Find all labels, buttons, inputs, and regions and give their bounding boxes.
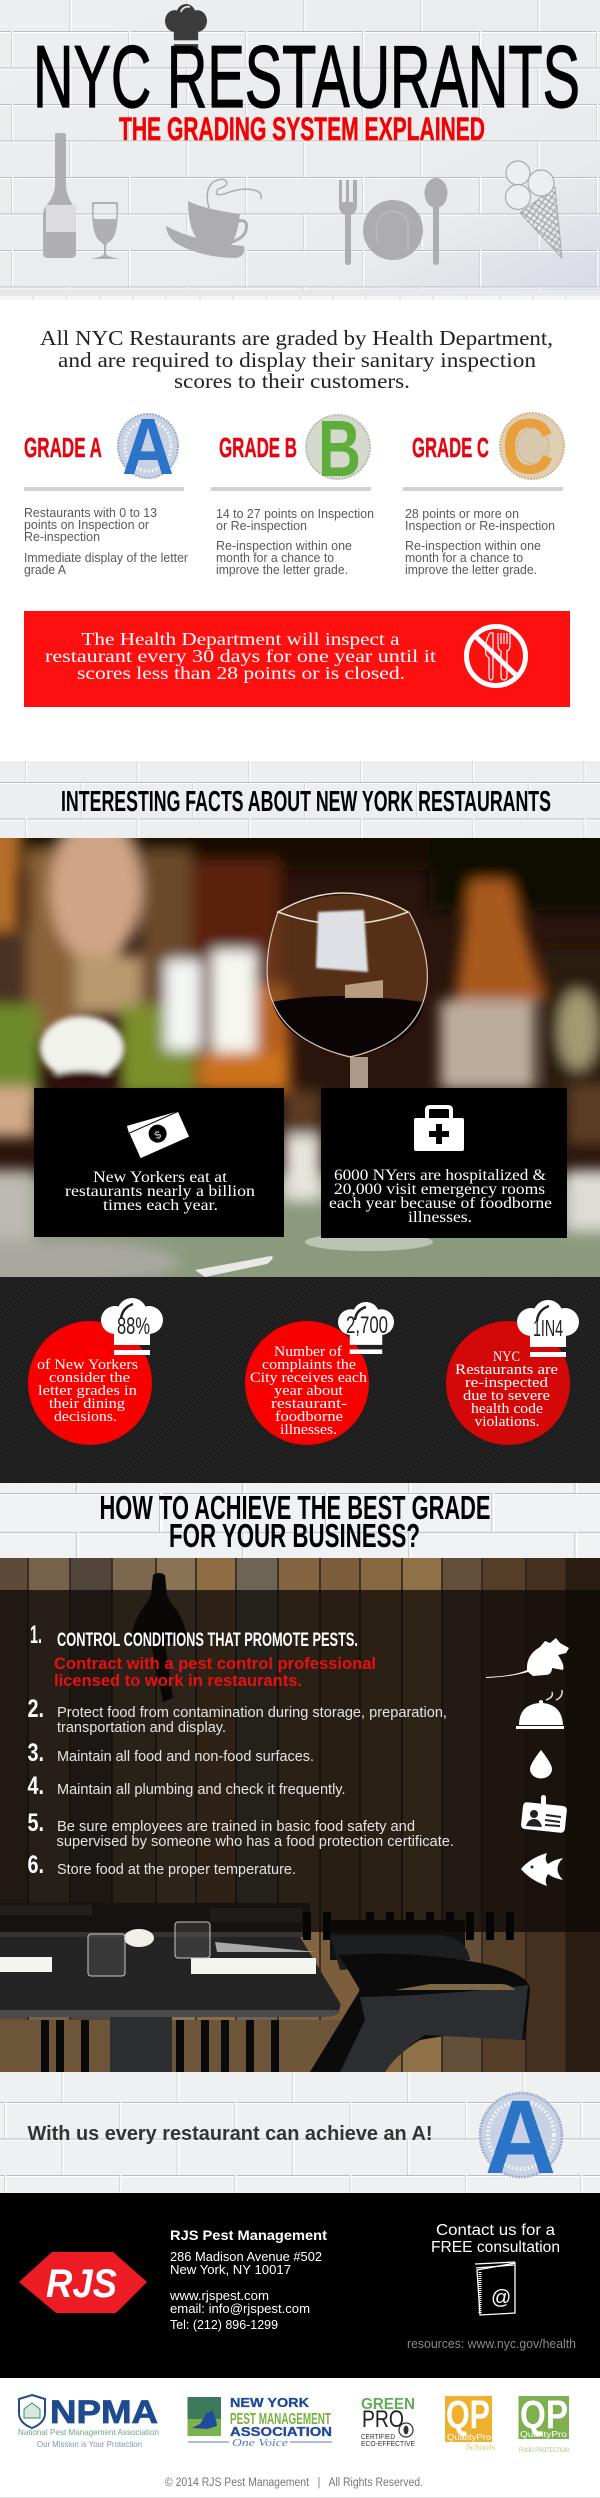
left wine glass <box>40 1016 124 1089</box>
statistic: 2,700: foodborne <box>275 1409 343 1425</box>
step 2: Protect food from contamination during storage, preparation, <box>57 1705 447 1721</box>
panel: grade C <box>403 402 564 577</box>
icon: banknotes <box>125 1104 190 1159</box>
logo: QualityPro Schools: Schools <box>466 2442 496 2452</box>
step 1: Contract with a pest control professional <box>54 1655 376 1673</box>
text: grade C description: month for a chance to <box>405 551 523 565</box>
logo: GreenPro <box>361 2396 415 2448</box>
logo: GreenPro: PRO <box>362 2406 404 2433</box>
logo: New York Pest Management Association: ASSOCIATION <box>230 2425 332 2439</box>
logo: NPMA: National Pest Management Association <box>18 2427 159 2437</box>
step 4: Maintain all plumbing and check it frequently. <box>57 1782 346 1798</box>
heading: how to achieve <box>100 1489 490 1554</box>
fact text: 20,000 visit emergency rooms <box>334 1181 545 1198</box>
icon: grade C seal: C <box>502 402 554 490</box>
company address: New York, NY 10017 <box>170 2262 291 2277</box>
statistic: 88%: 88% <box>117 1313 150 1340</box>
icon: grade A seal: A <box>122 402 174 491</box>
step 1: 1. <box>30 1621 42 1649</box>
text: grade C description: Inspection or Re-inspection <box>405 519 555 533</box>
foreground table <box>0 1922 340 2072</box>
step 1: CONTROL CONDITIONS THAT PROMOTE PESTS. <box>57 1630 358 1651</box>
step 6 <box>28 1851 296 1879</box>
statistic: 1 in 4: due to severe <box>463 1388 550 1404</box>
heading: grade A: GRADE A <box>24 432 102 463</box>
step 5 <box>28 1809 454 1850</box>
text: grade C description: improve the letter grade. <box>405 563 537 577</box>
logo: QualityPro Schools: QP <box>446 2393 490 2437</box>
company address: RJS Pest Management <box>170 2227 327 2243</box>
panel: wood wall and table photo <box>0 1558 600 2072</box>
contact call to action <box>431 2222 560 2256</box>
logo: RJS: RJS <box>46 2262 117 2306</box>
callout text: scores less than 28 points or is closed. <box>77 663 405 683</box>
text: grade B description: or Re-inspection <box>216 519 307 533</box>
panel: interesting facts heading band <box>0 761 600 838</box>
step 2: 2. <box>28 1695 44 1723</box>
company address: 286 Madison Avenue #502 <box>170 2249 322 2264</box>
icon: chef hat above title <box>165 4 207 48</box>
statistic: 1 in 4: Restaurants are <box>455 1362 558 1378</box>
text: grade B description: month for a chance to <box>216 551 334 565</box>
logo: GreenPro: GREEN <box>361 2396 415 2413</box>
step 3 <box>28 1739 314 1767</box>
text: grade B description: Re-inspection within one <box>216 539 352 553</box>
icon: rat <box>486 1638 569 1678</box>
lamp <box>130 1573 188 1643</box>
callout: health department inspection <box>24 611 570 707</box>
step 2 <box>28 1695 447 1736</box>
text: grade A description: points on Inspection or <box>24 518 149 532</box>
company address: Tel: (212) 896-1299 <box>170 2317 278 2332</box>
logo: GreenPro: ECO-EFFECTIVE <box>361 2439 415 2448</box>
statistic: 1 in 4: NYC <box>493 1349 520 1365</box>
background table and radiator <box>0 1903 510 1960</box>
logo: NPMA: NPMA <box>50 2394 158 2430</box>
icon: chef hat <box>517 1300 579 1357</box>
statistic: 88%: letter grades in <box>38 1383 138 1399</box>
icon: no food sign <box>466 626 526 686</box>
step 3: 3. <box>28 1739 44 1767</box>
statistic: 88%: of New Yorkers <box>37 1357 138 1373</box>
logo: GreenPro: CERTIFIED <box>361 2432 395 2441</box>
closing statement: With us every restaurant can achieve an A! <box>28 2123 432 2145</box>
statistic: 2,700 <box>245 1302 394 1445</box>
step 2: transportation and display. <box>57 1720 226 1736</box>
step 1: licensed to work in restaurants. <box>54 1672 302 1690</box>
icon: banknotes: $ <box>153 1129 163 1142</box>
icon: grade B seal: B <box>318 404 361 493</box>
logo: New York Pest Management Association: PEST MANAGEMENT <box>230 2411 331 2428</box>
fact text: each year because of foodborne <box>329 1195 552 1212</box>
fact text: New Yorkers eat at <box>93 1169 228 1186</box>
logo: QualityPro Food Protection <box>518 2393 569 2454</box>
icon: coffee cup and saucer <box>166 179 261 258</box>
contact call to action: Contact us for a <box>436 2222 555 2239</box>
icon: water drop <box>530 1750 552 1778</box>
icon: first aid kit <box>414 1107 464 1151</box>
intro text: scores to their customers. <box>174 369 410 393</box>
resources note: resources: www.nyc.gov/health <box>407 2337 576 2351</box>
step 1 <box>30 1621 376 1690</box>
text: grade B description: 14 to 27 points on Inspection <box>216 507 374 521</box>
statistic: 2,700: 2,700 <box>346 1312 388 1339</box>
icon: covered dish <box>516 1690 564 1729</box>
company address <box>169 2227 327 2332</box>
icon: wine bottle and glass <box>43 133 119 259</box>
fact text: restaurants nearly a billion <box>65 1183 255 1200</box>
logo: QualityPro Schools <box>445 2393 496 2452</box>
panel: dark statistics band <box>0 1277 600 1483</box>
text: grade B description: improve the letter grade. <box>216 563 348 577</box>
panel: how to achieve heading band <box>0 1483 600 1558</box>
statistic: 88%: consider the <box>49 1370 130 1386</box>
contact call to action: FREE consultation <box>431 2239 560 2256</box>
dark overlay band <box>0 1590 600 1932</box>
heading: grade B: GRADE B <box>219 432 297 463</box>
fact text: 6000 NYers are hospitalized & <box>334 1167 547 1184</box>
icon: fork, plate and spoon <box>339 178 448 265</box>
copyright: © 2014 RJS Pest Management | All Rights Reserved. <box>165 2477 423 2489</box>
text: grade C description <box>405 507 555 577</box>
text: grade A description: Re-inspection <box>24 530 100 544</box>
text: grade C description: 28 points or more on <box>405 507 519 521</box>
statistic: 2,700: complaints the <box>262 1357 356 1373</box>
callout text: restaurant every 30 days for one year until it <box>45 646 436 666</box>
step 6: Store food at the proper temperature. <box>57 1862 296 1878</box>
panel: grade B <box>211 404 374 577</box>
icon: chef hat <box>101 1298 163 1355</box>
fact text: illnesses. <box>408 1209 472 1226</box>
statistic: 2,700: Number of <box>274 1344 342 1360</box>
statistic: 2,700: City receives each <box>250 1370 368 1386</box>
company address: email: info@rjspest.com <box>170 2301 310 2316</box>
step 3: Maintain all food and non-food surfaces. <box>57 1749 314 1765</box>
logo: New York Pest Management Association: NEW YORK <box>230 2396 309 2410</box>
panel: contact footer <box>0 2193 600 2378</box>
text: grade C description: Re-inspection within one <box>405 539 541 553</box>
statistic: 88%: decisions. <box>54 1409 117 1425</box>
icon: grade A seal: A <box>485 2079 556 2196</box>
list: how to achieve the best grade <box>28 1621 454 1879</box>
logo: New York Pest Management Association <box>188 2396 332 2449</box>
step 4 <box>28 1772 346 1800</box>
text: grade A description: Immediate display of the letter <box>24 551 188 565</box>
intro text <box>40 326 553 393</box>
heading: grade C: GRADE C <box>412 432 489 463</box>
step 5: 5. <box>28 1809 44 1837</box>
statistic: 2,700: restaurant- <box>271 1396 347 1412</box>
logo: NPMA <box>18 2394 159 2449</box>
intro text: All NYC Restaurants are graded by Health Department, <box>40 326 553 350</box>
logo: QualityPro Food Protection: QP <box>520 2393 568 2437</box>
heading: how to achieve: FOR YOUR BUSINESS? <box>169 1517 420 1554</box>
panel: header brick wall <box>0 0 600 300</box>
text: grade B description <box>216 507 374 577</box>
fact text: times each year. <box>103 1197 218 1214</box>
callout text <box>45 629 436 683</box>
step 6: 6. <box>28 1851 44 1879</box>
icon: fish <box>521 1853 563 1886</box>
icon: address book: @ <box>491 2287 511 2309</box>
company address: www.rjspest.com <box>169 2288 269 2303</box>
statistic: 1 in 4: violations. <box>474 1414 540 1430</box>
panel: grade A <box>24 402 188 577</box>
statistic: 1 in 4: re-inspected <box>465 1375 549 1391</box>
statistic: 2,700: year about <box>274 1383 343 1399</box>
icon: chef hat <box>338 1302 394 1354</box>
statistic: 88%: their dining <box>49 1396 125 1412</box>
statistic: 88% <box>28 1298 163 1445</box>
foreground wine glass <box>267 893 433 1251</box>
panel: fact, dining out <box>34 1088 284 1237</box>
fact text <box>65 1169 255 1214</box>
statistic: 1 in 4: 1IN4 <box>533 1315 563 1341</box>
panel: fact, foodborne illness <box>321 1088 567 1238</box>
statistic: 2,700: illnesses. <box>280 1422 337 1438</box>
intro text: and are required to display their sanitary inspection <box>58 348 537 372</box>
logo: RJS <box>19 2252 147 2313</box>
knife on table <box>195 1256 273 1277</box>
logo: NPMA: Our Mission is Your Protection <box>37 2440 142 2449</box>
icon: id badge <box>521 1795 567 1833</box>
step 5: Be sure employees are trained in basic food safety and <box>57 1819 415 1835</box>
step 5: supervised by someone who has a food protection certificate. <box>56 1834 454 1850</box>
statistic: 1 in 4: health code <box>471 1401 543 1417</box>
panel: closing brick band <box>0 2072 600 2196</box>
icon: ice cream cone <box>506 161 562 258</box>
text: grade A description <box>24 506 188 577</box>
chairs <box>310 1935 530 2072</box>
logo: QualityPro Schools: QualityPro <box>447 2433 492 2442</box>
fact text <box>329 1167 552 1226</box>
panel: restaurant photo <box>0 838 600 1277</box>
text: grade A description: grade A <box>24 563 67 577</box>
step 4: 4. <box>28 1772 44 1800</box>
logo: New York Pest Management Association: One Voice <box>232 2437 288 2449</box>
icon: address book <box>475 2262 515 2315</box>
logo: QualityPro Food Protection: QualityPro <box>520 2430 568 2439</box>
statistic: 1 in 4 <box>446 1300 579 1445</box>
text: grade A description: Restaurants with 0 to 13 <box>24 506 157 520</box>
callout text: The Health Department will inspect a <box>82 629 400 649</box>
logo: QualityPro Food Protection: FOOD PROTECTION <box>519 2448 569 2454</box>
